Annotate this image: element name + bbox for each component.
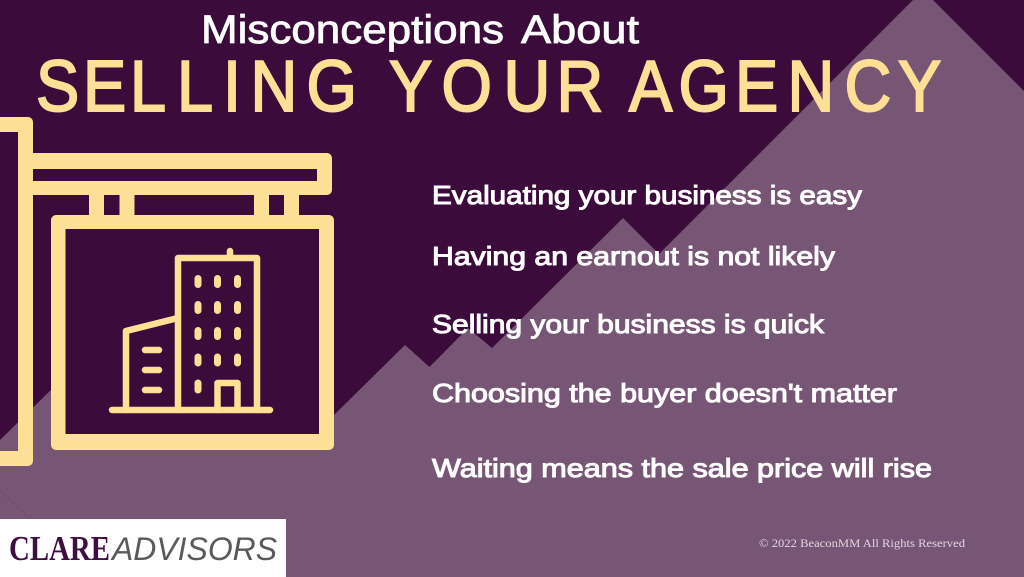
sign arm — [33, 153, 332, 195]
low building windows — [145, 350, 159, 390]
tall building — [178, 251, 257, 410]
item 2: Having an earnout is not likely — [432, 241, 835, 271]
ground line — [112, 407, 270, 413]
logo word: advisors: ADVISORS — [110, 531, 277, 567]
low building — [126, 318, 178, 410]
title: misconceptions about: About — [521, 8, 639, 52]
logo word: clare: CLARE — [9, 529, 110, 568]
item 1: Evaluating your business is easy — [432, 180, 862, 210]
sign board — [51, 215, 334, 450]
title: misconceptions about: Misconceptions — [201, 8, 504, 52]
building door — [218, 383, 238, 410]
logo: clare advisors — [0, 519, 286, 577]
item 3: Selling your business is quick — [432, 309, 825, 339]
sign post — [0, 117, 33, 466]
icon: office buildings — [112, 251, 270, 410]
item 5: Waiting means the sale price will rise — [432, 453, 932, 483]
title: selling your agency: SELLING YOUR AGENCY — [36, 46, 941, 127]
icon: hanging agency sign — [0, 117, 334, 466]
misconception list — [432, 180, 932, 483]
copyright notice: © 2022 BeaconMM All Rights Reserved — [759, 536, 965, 550]
item 4: Choosing the buyer doesn't matter — [432, 378, 897, 408]
title: misconceptions about — [201, 8, 639, 52]
logo background — [0, 519, 286, 577]
sign hangers — [96, 195, 292, 215]
tower windows — [198, 278, 238, 390]
